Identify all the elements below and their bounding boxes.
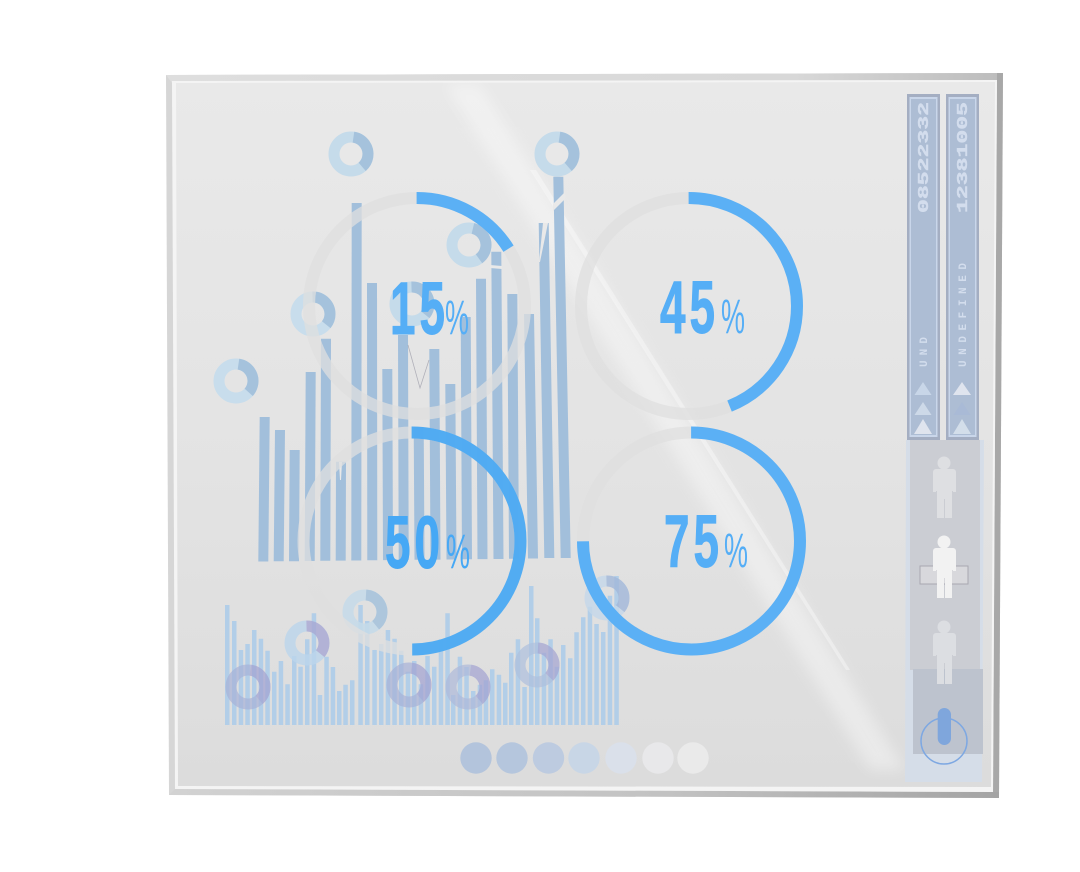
icon: donut 5: [395, 287, 429, 321]
icon: highlighted person with bar: [920, 536, 968, 598]
icon: person 3: [933, 620, 956, 684]
label: 45%: 45: [660, 267, 719, 350]
lower small donuts: [228, 581, 624, 707]
chart: 15 percent ring: [309, 198, 525, 414]
icon: donut 13: [590, 581, 624, 615]
chart: 45 percent ring: [581, 198, 797, 414]
label: 75%: 75: [664, 501, 723, 584]
label: 45%: %: [721, 291, 745, 344]
icon: donut 6: [216, 361, 256, 401]
label: 50%: %: [446, 526, 470, 579]
label: 50%: [385, 502, 470, 585]
icon: triangles: [914, 382, 932, 434]
chart: 50 percent ring: [304, 432, 520, 650]
icon: donut 9: [228, 667, 268, 707]
icon: power button: [921, 708, 967, 764]
infographic canvas: [166, 73, 1003, 798]
column code digits: 12381005: [955, 102, 972, 213]
icon: person 1: [933, 456, 956, 518]
glass cuts across bars: [339, 192, 565, 480]
icon: donut 8: [290, 626, 324, 660]
panel: status column 2: [946, 94, 979, 440]
bar chart: small bars: [225, 576, 619, 725]
icon: donut 2: [537, 134, 577, 174]
icon: donut 7: [347, 594, 383, 630]
panel: status column 1: [907, 94, 940, 440]
upper ring charts: small donuts: [216, 134, 577, 401]
icon: donut 4: [296, 297, 330, 331]
label: 50%: 50: [385, 502, 444, 585]
column code digits: 08522332: [916, 102, 933, 213]
icon: donut 1: [331, 134, 371, 174]
faint sketch line: [408, 345, 429, 388]
label: 45%: [660, 267, 745, 350]
column label: UNDEFINED: UNDEFINED: [958, 263, 970, 367]
bar chart: large bars: [258, 177, 571, 561]
icon: donut 3: [448, 224, 490, 266]
label: 15%: %: [445, 292, 469, 345]
label: 75%: %: [724, 525, 748, 578]
label: 15%: 15: [390, 268, 449, 351]
icon: donut 10: [389, 665, 429, 705]
icon: donut 12: [519, 647, 555, 683]
chart: 75 percent ring: [583, 432, 800, 650]
icon: triangles: [953, 382, 971, 434]
glass reflection streak: [484, 128, 894, 767]
column label: UND: UND: [919, 337, 931, 367]
panel: people selector: [905, 440, 984, 782]
panel: glass frame: [166, 73, 1003, 798]
icon: donut 11: [448, 667, 488, 707]
pagination dots: [460, 742, 709, 774]
